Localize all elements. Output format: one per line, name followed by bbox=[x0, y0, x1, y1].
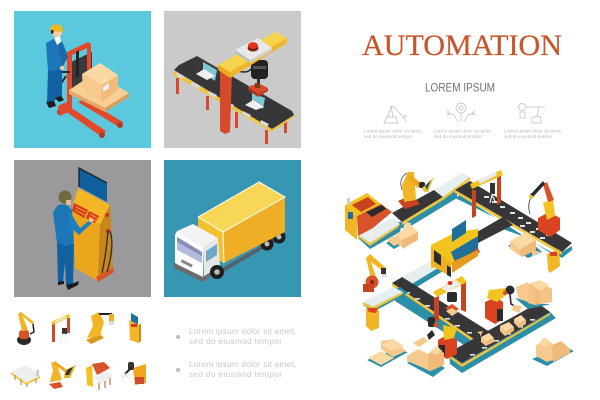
bullet text one bbox=[176, 326, 296, 346]
icon: outline drill robot bbox=[518, 104, 545, 123]
icon: truck rear wheels bbox=[260, 230, 286, 250]
bullet text two bbox=[176, 359, 296, 379]
conveyor: bottom bbox=[448, 303, 556, 373]
icon: outline robot arm bbox=[384, 106, 406, 123]
panel: operator at control kiosk bbox=[14, 160, 151, 297]
icon: stacker handle bbox=[57, 72, 70, 82]
icon: robot actuator bbox=[238, 60, 268, 97]
bullet text one: Lorem ipsum dolor sit amet, bbox=[189, 326, 296, 336]
text block: column two bbox=[434, 128, 492, 139]
icon: mini robot with gripper bbox=[122, 362, 146, 385]
boxes on bottom conveyor bbox=[477, 315, 526, 346]
icon: kiosk screen bbox=[79, 168, 107, 202]
icon: kiosk body bbox=[72, 188, 114, 282]
boxes: stack by upper robot bbox=[515, 280, 552, 309]
icon: truck cab bbox=[174, 224, 224, 282]
production line illustration bbox=[345, 170, 574, 377]
icon: cardboard box bbox=[82, 63, 118, 102]
icon: stacker legs bbox=[57, 99, 123, 138]
robot: mid left bbox=[363, 254, 387, 292]
robot: right with drill bbox=[529, 181, 560, 237]
bullet text one: sed do eiusmod tempor bbox=[189, 336, 282, 346]
icon: gantry post bbox=[220, 70, 232, 134]
boxes: upper left stack bbox=[386, 222, 418, 249]
conveyor: middle connector bbox=[477, 217, 513, 243]
icon: operator bbox=[53, 190, 93, 290]
boxes: upper right stack bbox=[508, 232, 542, 258]
icon row: small robots top bbox=[17, 312, 141, 345]
conveyor: upper right bbox=[455, 181, 572, 258]
icon: worker bbox=[46, 24, 68, 108]
text block: column one: Lorem ipsum dolor sit amet, bbox=[364, 128, 422, 134]
icon: mini roller conveyor bbox=[11, 365, 40, 387]
gantry: upper bbox=[470, 170, 503, 218]
gantry: lower with button bbox=[433, 276, 467, 322]
icon: robot arm on round base bbox=[17, 312, 34, 345]
panel: worker with pallet stacker bbox=[14, 11, 151, 148]
icon: mini gantry bbox=[51, 314, 70, 342]
text block: column one: sed do eiusmod tempor bbox=[364, 134, 413, 139]
robot: lower with gripper bbox=[413, 317, 457, 359]
panel: delivery truck bbox=[164, 160, 301, 297]
icon: mini kiosk bbox=[129, 313, 141, 343]
conveyor: lower main diagonal bbox=[392, 277, 490, 352]
subtitle: LOREM IPSUM bbox=[425, 80, 495, 94]
kiosk: right bbox=[547, 249, 560, 273]
text block: column one bbox=[364, 128, 422, 139]
icon: stacker mast bbox=[67, 42, 92, 112]
bullet text two: Lorem ipsum dolor sit amet, bbox=[189, 359, 296, 369]
icon: conveyor legs bbox=[176, 78, 287, 144]
icon row: small robots bottom bbox=[11, 361, 146, 390]
icon: laptop right bbox=[245, 93, 265, 110]
pallet: boxes bottom right bbox=[532, 338, 574, 366]
text block: column three bbox=[504, 128, 562, 139]
text block: column two: Lorem ipsum dolor sit amet, bbox=[434, 128, 492, 134]
conveyor: middle rollers bbox=[402, 256, 448, 290]
pallet: boxes bottom centre bbox=[407, 346, 445, 377]
robot: top with screen bbox=[398, 172, 434, 209]
icon: laptop left bbox=[196, 62, 217, 81]
machine: press left bbox=[345, 193, 392, 240]
machine: central yellow bbox=[431, 220, 480, 277]
conveyor: lower left rollers bbox=[363, 287, 408, 312]
conveyor belt bbox=[173, 56, 295, 132]
icon: outline gears and wrenches bbox=[447, 103, 475, 122]
pallet: boxes bottom left bbox=[367, 339, 408, 367]
conveyor: upper left bbox=[358, 173, 470, 249]
icon: large yellow robot bbox=[86, 312, 114, 344]
icon: cargo box bbox=[198, 182, 285, 263]
bullet text two: sed do eiusmod tempor bbox=[189, 369, 282, 379]
panel: conveyor with laptops bbox=[164, 11, 301, 148]
kiosk: lower left bbox=[366, 307, 379, 331]
icon: mini assembly machine bbox=[86, 362, 113, 390]
icon: mini robot with screen bbox=[49, 361, 76, 389]
robot: upper lower-right bbox=[485, 286, 522, 324]
title: AUTOMATION bbox=[362, 29, 562, 62]
icon: gantry beam bbox=[218, 32, 287, 78]
text block: column three: Lorem ipsum dolor sit amet, bbox=[504, 128, 562, 134]
text block: column two: sed do eiusmod tempor bbox=[434, 134, 483, 139]
icon: pallet bbox=[69, 73, 129, 112]
icon: truck shadow bbox=[220, 232, 285, 274]
text block: column three: sed do eiusmod tempor bbox=[504, 134, 553, 139]
